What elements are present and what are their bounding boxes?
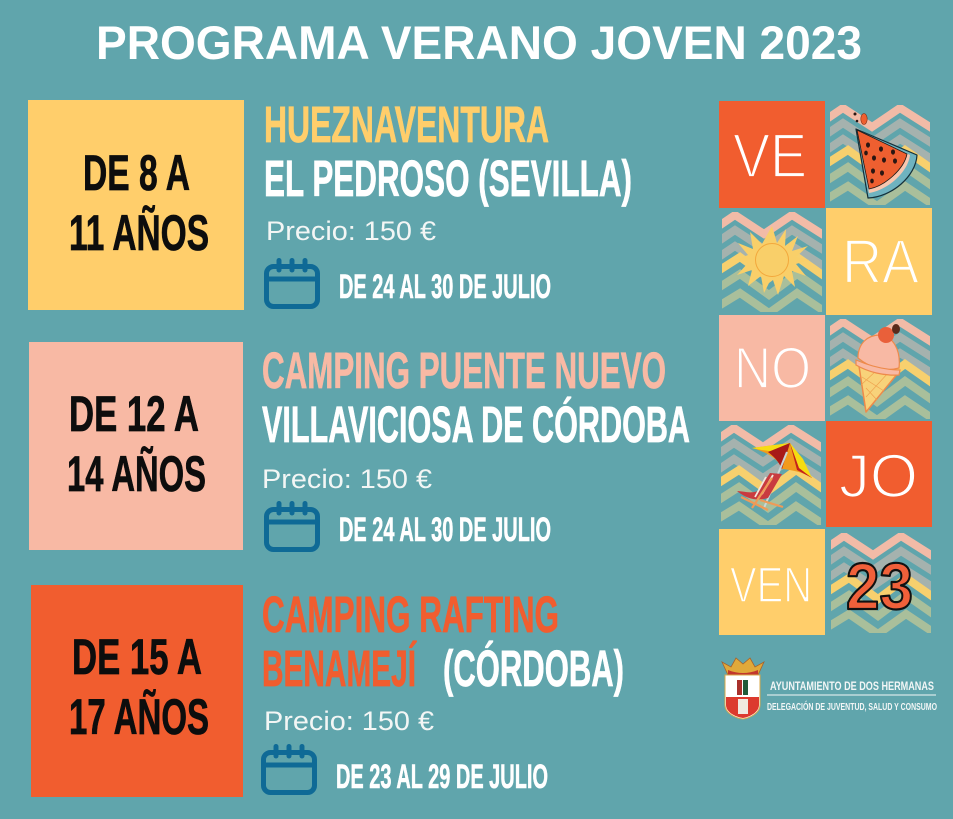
tile: RA: RA [842,228,920,297]
age label: DE 8 A [83,145,190,201]
dates: DE 24 AL 30 DE JULIO [339,268,551,306]
tile: VE: VE [733,122,807,191]
age label: 14 AÑOS [67,446,206,502]
title: PROGRAMA VERANO JOVEN 2023 [96,16,862,69]
age box [28,100,244,310]
location: (CÓRDOBA) [443,640,624,697]
panel: ages 15 to 17 [31,585,624,797]
tile: 23 [816,536,953,634]
icon: calendar [266,260,318,306]
logo: Ayuntamiento de Dos Hermanas [722,658,937,719]
activity name: HUEZNAVENTURA [264,96,549,153]
age label: 17 AÑOS [69,689,209,745]
age label: DE 12 A [69,386,199,442]
age label [69,145,209,261]
panel: ages 8 to 11 [28,96,632,310]
age label [67,386,206,502]
activity name [262,586,559,697]
tile: watermelon [815,108,953,206]
tile: NO: NO [734,336,811,401]
icon: calendar [264,746,314,792]
tile: sun [707,215,852,313]
tile: ice cream [815,322,953,420]
activity name: CAMPING PUENTE NUEVO [262,342,666,399]
tile: JO [826,421,932,527]
tile: NO [719,315,825,421]
location: EL PEDROSO (SEVILLA) [264,150,632,207]
activity name: CAMPING RAFTING [262,586,559,643]
price: Precio: 150 € [262,464,432,494]
age label [69,629,209,745]
dates: DE 24 AL 30 DE JULIO [339,511,551,549]
icon: coat of arms [722,658,764,719]
age label: 11 AÑOS [69,205,209,261]
price: Precio: 150 € [264,706,434,736]
activity name: BENAMEJÍ [262,640,417,697]
age box [29,342,243,550]
tile: 23: 23 [846,549,913,623]
panel: summer mosaic [706,101,953,635]
tile: JO: JO [839,442,918,510]
tile: RA [826,208,932,315]
age label: DE 15 A [72,629,202,685]
tile: VEN [719,529,825,635]
panel: ages 12 to 14 [29,342,690,550]
dates: DE 23 AL 29 DE JULIO [336,758,548,796]
age box [31,585,243,797]
tile: VE [719,101,825,208]
icon: calendar [266,504,318,550]
tile: beach chair and umbrella [706,428,851,526]
tile: VEN: VEN [730,557,812,613]
price: Precio: 150 € [266,216,436,246]
